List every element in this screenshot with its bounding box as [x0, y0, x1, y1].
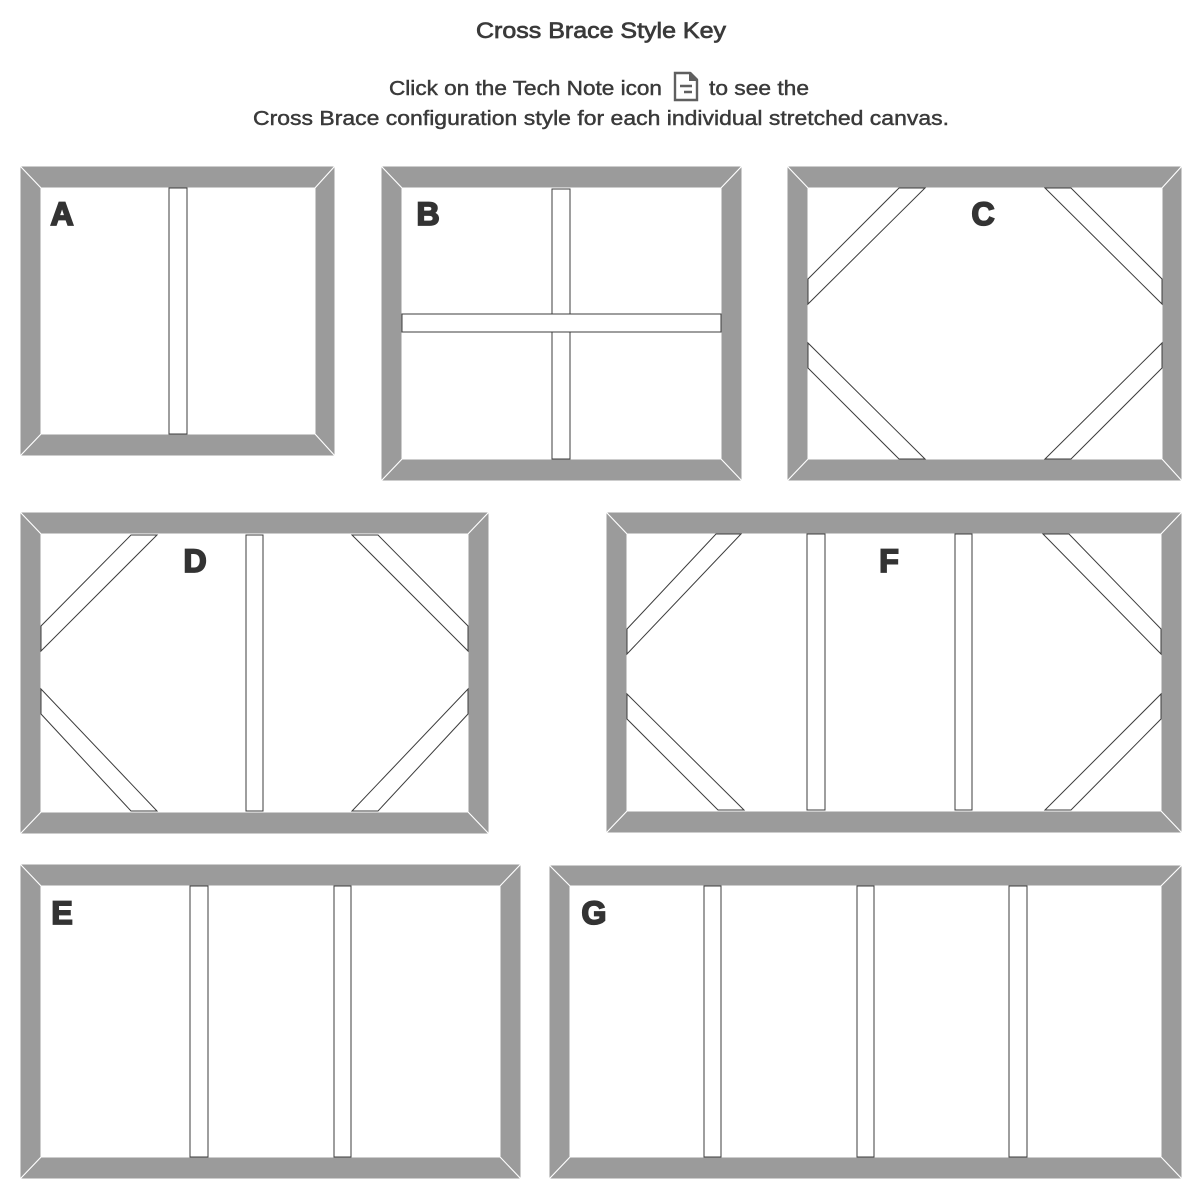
instruction text line 2: Cross Brace configuration style for each individual stretched canvas. [253, 107, 949, 130]
icon: tech note document [675, 72, 698, 100]
label C: C [971, 196, 995, 232]
panel: style E [20, 864, 521, 1179]
label A: A [50, 196, 74, 232]
label E: E [51, 895, 73, 931]
panel: style F [606, 512, 1182, 833]
instruction text line 1: Click on the Tech Note icon [389, 77, 662, 100]
panel: style B [381, 166, 742, 481]
panel: style G [549, 865, 1182, 1179]
braces F [627, 534, 1161, 810]
instruction text line 1 end: to see the [709, 77, 809, 100]
brace: vertical and horizontal B [402, 189, 721, 459]
braces E [190, 886, 351, 1157]
label D: D [183, 543, 207, 579]
brace: vertical A [169, 188, 187, 434]
label F: F [879, 543, 899, 579]
label G: G [582, 895, 606, 931]
panel: style D [20, 512, 489, 834]
braces D [41, 535, 468, 811]
panel: style C [787, 166, 1182, 481]
label B: B [416, 196, 440, 232]
braces G [704, 886, 1027, 1157]
title: Cross Brace Style Key [476, 18, 726, 43]
panel: style A [20, 166, 335, 456]
corner braces C [808, 188, 1162, 459]
